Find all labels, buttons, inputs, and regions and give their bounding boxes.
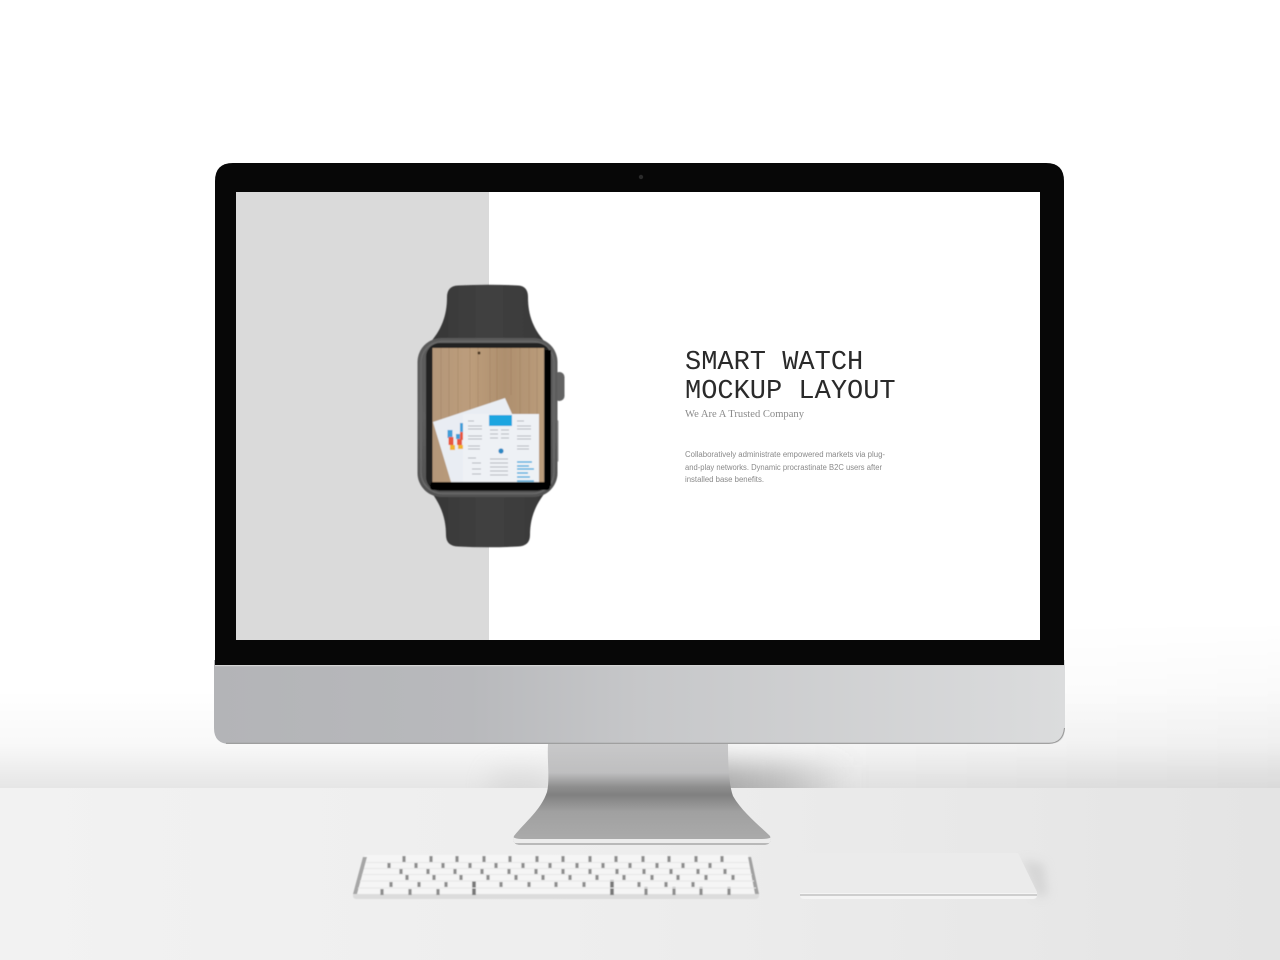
- trackpad surface: [797, 853, 1037, 898]
- monitor chin: [214, 660, 1065, 744]
- gray side panel: [236, 192, 489, 640]
- body text: and-play networks. Dynamic procrastinate B2C users after: [685, 463, 882, 472]
- smart watch: [418, 285, 564, 547]
- body text: [685, 450, 885, 484]
- body text: installed base benefits.: [685, 475, 764, 484]
- slide background: [236, 192, 1040, 640]
- watch crown and side button: [554, 372, 564, 462]
- chart bars: [448, 423, 464, 450]
- watch strap: [428, 285, 549, 547]
- brochure flat: [463, 414, 539, 482]
- slide screen: [236, 192, 1040, 640]
- keyboard: [353, 855, 759, 899]
- subtitle: We Are A Trusted Company: [685, 408, 804, 420]
- monitor shadow on wall: [498, 750, 836, 788]
- keyboard body: [353, 855, 759, 899]
- wood background: [432, 348, 544, 482]
- title: SMART WATCH: [685, 348, 863, 378]
- trackpad shadow: [1022, 860, 1048, 896]
- trackpad: [797, 853, 1048, 899]
- webcam: [639, 175, 643, 179]
- brochure rotated: [433, 398, 513, 482]
- brochure text lines: [468, 421, 531, 475]
- blue dot: [498, 448, 504, 454]
- body text: Collaboratively administrate empowered markets via plug-: [685, 450, 885, 459]
- title: MOCKUP LAYOUT: [685, 377, 896, 407]
- monitor bezel: [215, 163, 1064, 665]
- keyboard key gaps: [382, 856, 733, 895]
- monitor stand: [510, 744, 774, 846]
- watch case: [418, 338, 558, 497]
- watch screen photo: [432, 348, 544, 482]
- background: desk: [0, 788, 1280, 960]
